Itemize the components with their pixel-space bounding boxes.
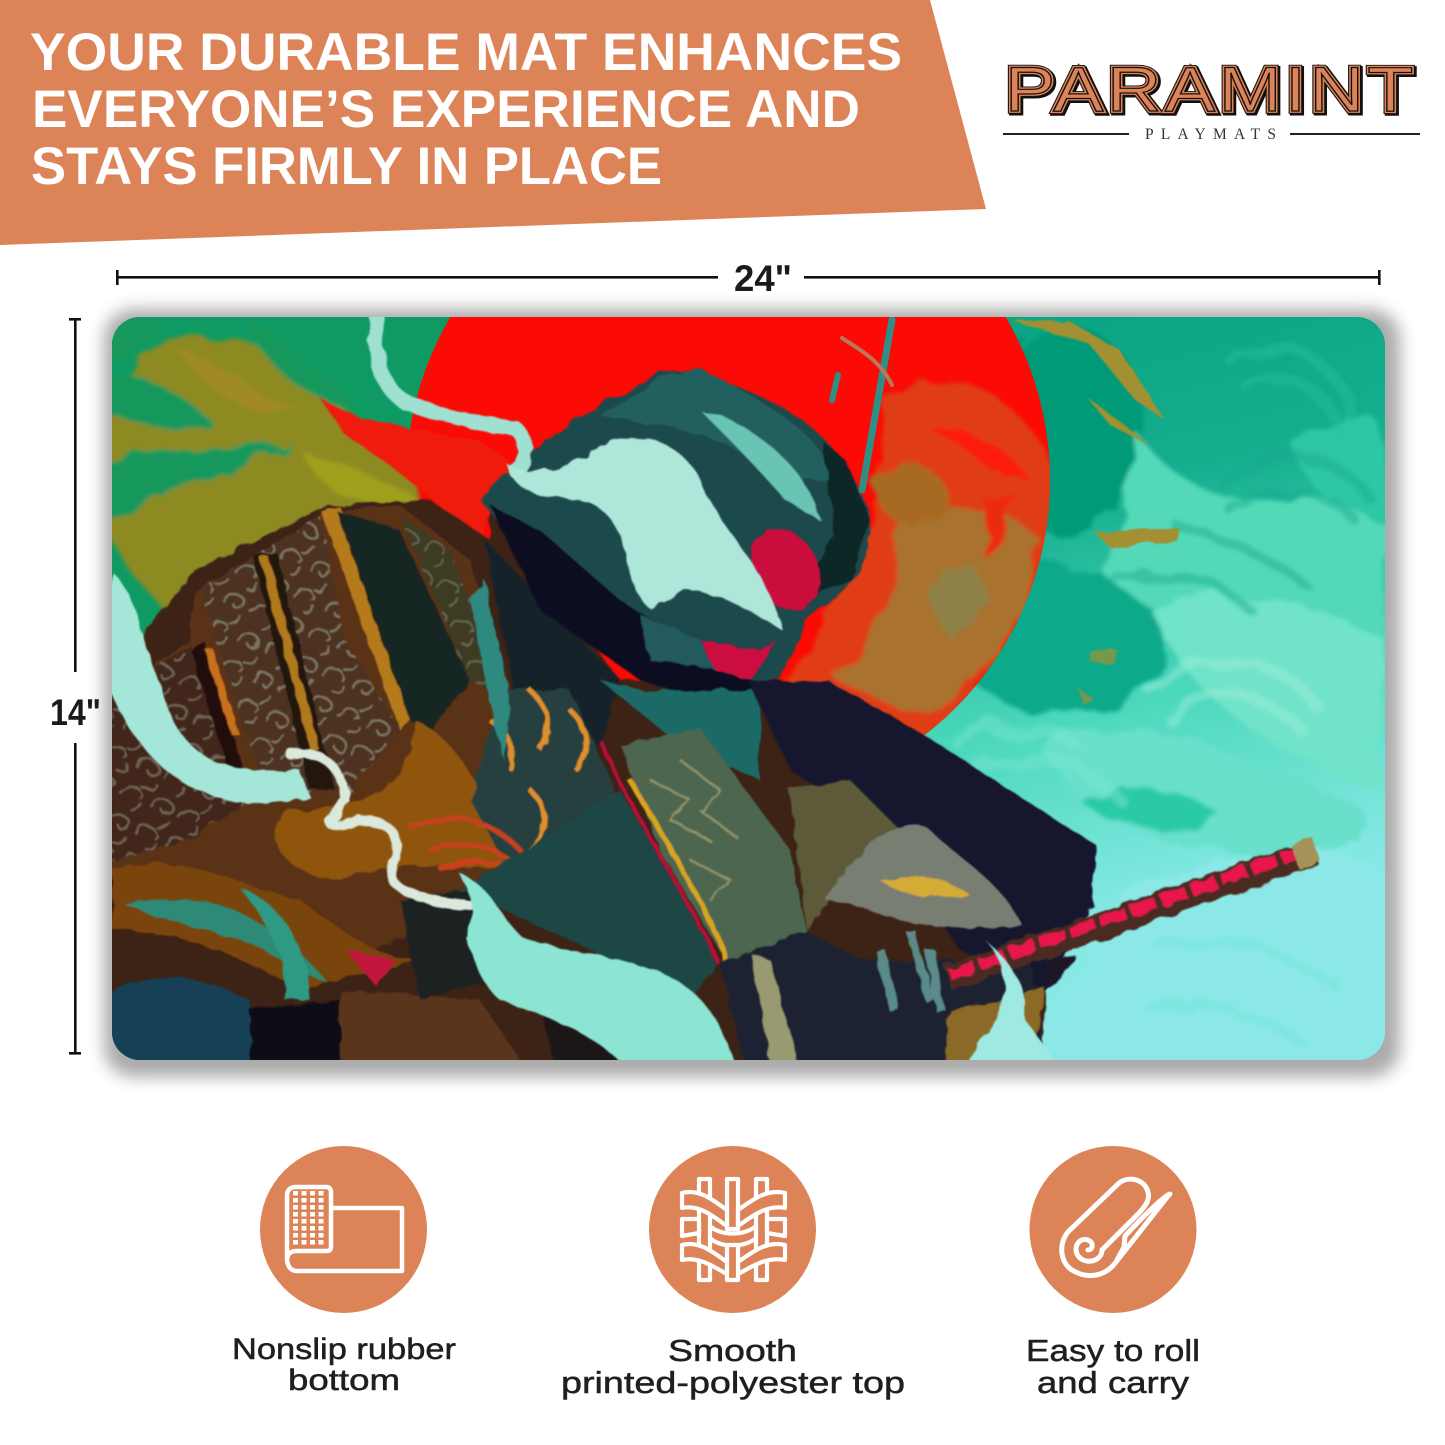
lower body and arm (718, 779, 1045, 1060)
title banner: STAYS FIRMLY IN PLACE (31, 137, 662, 196)
white smoke wisps (105, 310, 740, 1090)
height dimension: 14 inches: 14" (50, 692, 101, 733)
lower left foreground (112, 790, 720, 1060)
label: bottom (288, 1364, 400, 1397)
helmet smoke (505, 438, 782, 630)
logo: Paramint Playmats: PARAMINT (1005, 55, 1417, 125)
feature 2: smooth printed-polyester top (561, 1146, 905, 1400)
title banner (0, 0, 986, 245)
logo: Paramint Playmats (1003, 55, 1420, 143)
figure base (100, 500, 1045, 1090)
chest plate (600, 728, 806, 965)
label: and carry (1037, 1365, 1190, 1400)
label (561, 1333, 905, 1400)
mist by the hand (968, 940, 1052, 1060)
cloud brush arcs (950, 350, 1370, 1040)
gold flecks in sky (1010, 320, 1180, 706)
playmat artwork: samurai and red sun (112, 317, 1385, 1060)
label: Easy to roll (1026, 1333, 1200, 1368)
feature 1: nonslip rubber bottom (232, 1146, 456, 1397)
icon: rolled mat (1030, 1146, 1196, 1313)
title banner: YOUR DURABLE MAT ENHANCES (30, 23, 902, 82)
red flame beside helmet (320, 398, 520, 545)
helmet and dark band (480, 368, 870, 780)
width dimension: 24 inches: 24" (734, 258, 792, 299)
label: Nonslip rubber (232, 1333, 456, 1366)
title banner: EVERYONE’S EXPERIENCE AND (32, 80, 860, 139)
icon: woven fabric (649, 1146, 816, 1313)
teal clouds (975, 328, 1385, 1060)
sun swirl (780, 376, 1060, 744)
cape (748, 680, 1097, 990)
label: printed-polyester top (561, 1365, 905, 1400)
logo: Paramint Playmats: PLAYMATS (1145, 126, 1276, 143)
helmet horns (832, 320, 892, 490)
olive smoke top left (112, 318, 422, 610)
mat drop shadow (104, 309, 1400, 1077)
label (232, 1333, 456, 1397)
red sun (410, 317, 1050, 736)
sword handle (948, 835, 1320, 990)
label: Smooth (668, 1333, 797, 1368)
face mask (700, 529, 821, 680)
sky background (112, 317, 1385, 1060)
icon: rolled mat with rubber dots (260, 1146, 427, 1313)
feature 3: easy to roll and carry (1026, 1146, 1200, 1400)
armour plates (112, 505, 615, 990)
logo: Paramint Playmats: PARAMINT (1005, 55, 1417, 125)
logo: Paramint Playmats: PARAMINT (1006, 56, 1418, 126)
label (1026, 1333, 1200, 1400)
logo: Paramint Playmats: PARAMINT (1005, 55, 1417, 125)
